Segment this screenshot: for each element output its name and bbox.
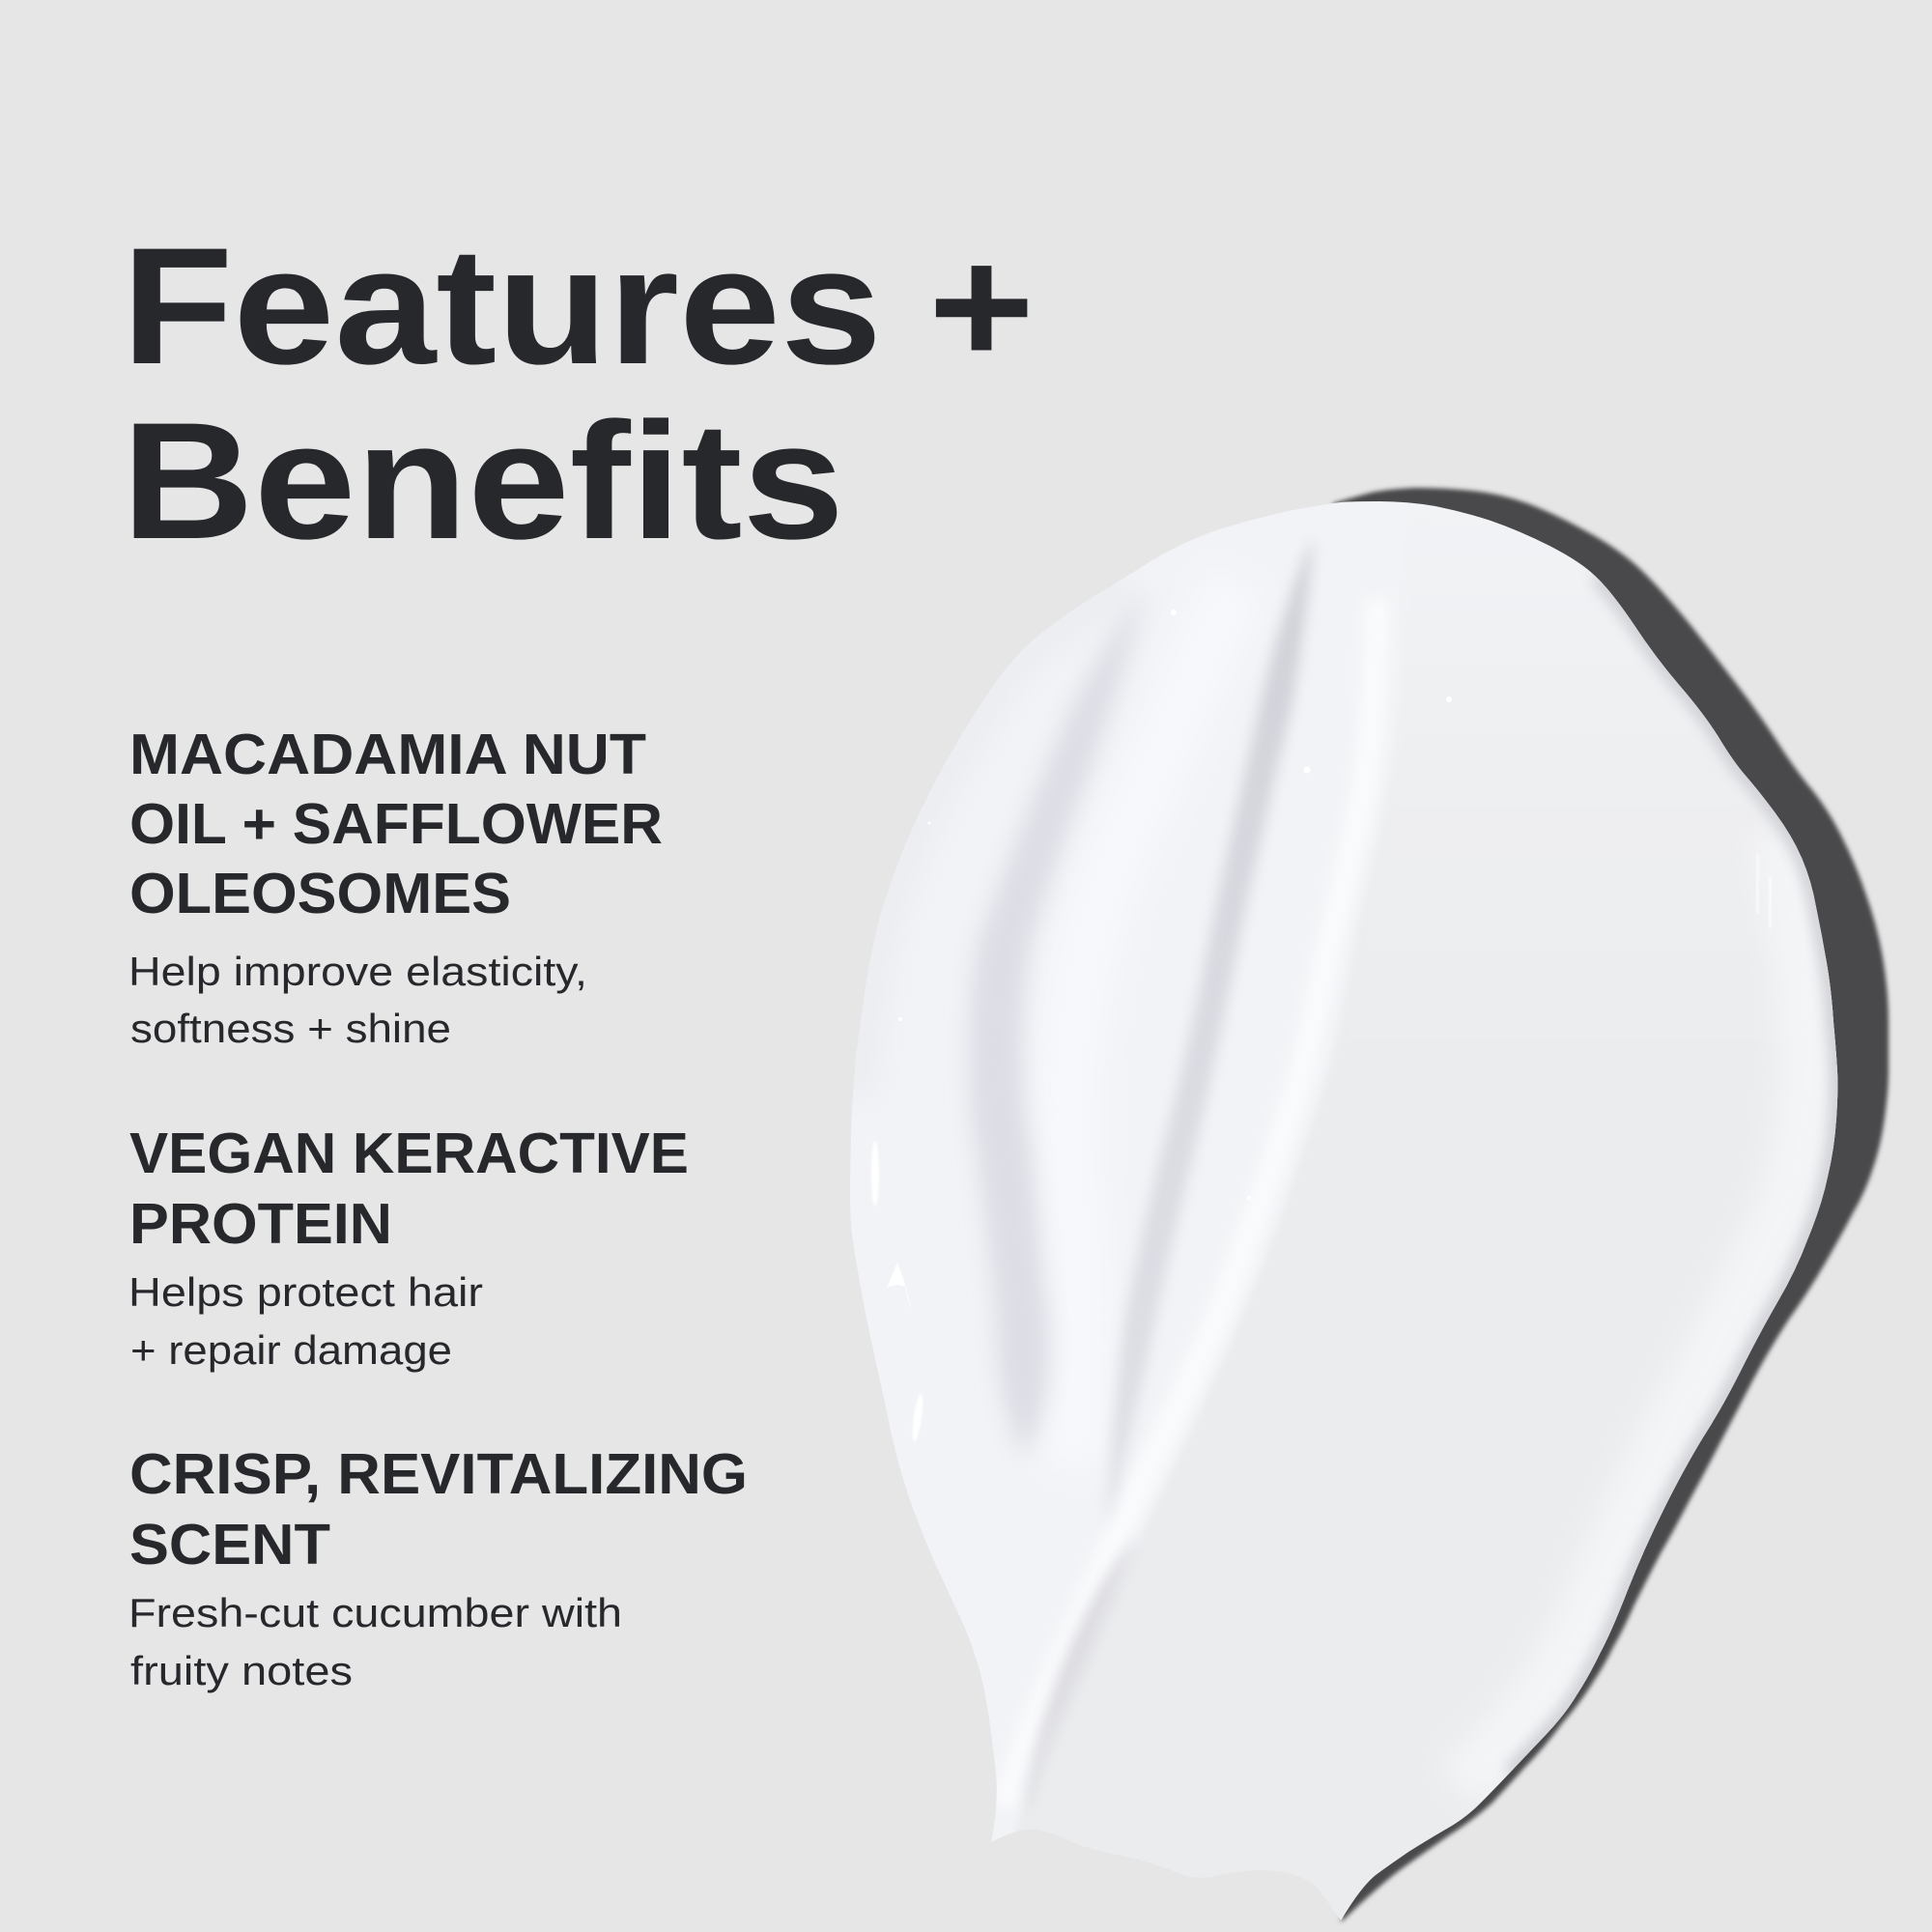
cream swatch [850,501,1837,1920]
cream base [831,483,1874,1932]
feature description: Help improve elasticity, [128,949,587,994]
furrow B [970,589,1146,1459]
title: Features [122,213,882,399]
right rim highlight [1459,831,1808,1787]
feature description [128,1269,483,1373]
furrow lower centre [1026,1548,1130,1792]
feature: crisp, revitalizing scent [128,1442,748,1693]
title [122,213,1035,574]
feature description: fruity notes [130,1648,353,1693]
feature heading: PROTEIN [129,1192,392,1256]
inner edge shade [1510,577,1837,1773]
flat smoothed area [1341,507,1837,1920]
feature heading: OIL + SAFFLOWER [129,792,663,856]
feature heading [129,723,663,925]
feature heading [129,1122,689,1256]
ridge highlight beside flat area [1132,1478,1141,1495]
gloss highlights [871,610,1771,1441]
feature heading: CRISP, REVITALIZING [129,1442,748,1506]
feature heading [129,1442,748,1577]
feature heading: OLEOSOMES [129,862,511,925]
furrow A [1106,536,1314,1531]
title: + [928,213,1035,399]
feature heading: MACADAMIA NUT [129,723,646,786]
feature heading: SCENT [129,1513,330,1577]
title: Benefits [122,388,844,574]
feature description [128,1590,622,1693]
feature description: + repair damage [130,1327,452,1373]
feature: macadamia nut oil + safflower oleosomes [128,723,663,1051]
feature: vegan keractive protein [128,1122,689,1373]
feature heading: VEGAN KERACTIVE [129,1122,689,1185]
upper left lobe tint [852,579,1123,1096]
feature description: Helps protect hair [128,1269,483,1315]
feature description: Fresh-cut cucumber with [128,1590,622,1635]
ridge highlight between furrows [1067,580,1236,1468]
cream swatch shadow [1333,488,1889,1922]
feature description: softness + shine [130,1006,451,1051]
feature description [128,949,587,1051]
